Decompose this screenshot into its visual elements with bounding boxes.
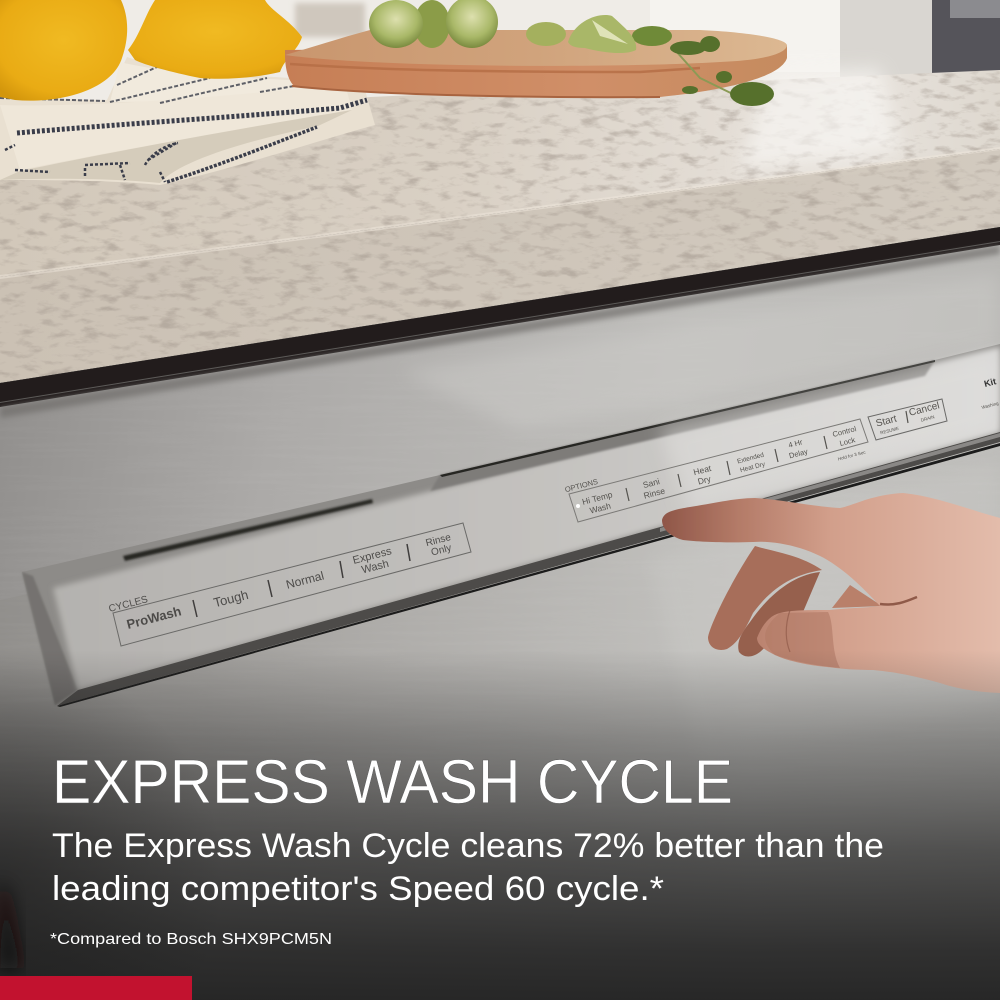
control panel: options group: Start: [875, 414, 898, 430]
control panel: options group: Wash: [589, 501, 612, 516]
dark gradient overlay: [0, 650, 1000, 1000]
control panel: options group: Rinse: [642, 485, 666, 501]
control panel: options group: [564, 376, 1000, 522]
towel: [0, 57, 375, 185]
control panel: options group: DRAIN: [920, 414, 935, 423]
body text: leading competitor's Speed 60 cycle.*: [52, 870, 664, 908]
control panel: options group: Control: [832, 424, 858, 439]
herbs: [670, 36, 774, 106]
control panel: options group: Hi Temp: [581, 489, 614, 507]
control panel: options group: Washing: [981, 401, 1000, 410]
control panel: cycles group: Express: [352, 545, 393, 567]
control panel: cycles group: Only: [430, 543, 453, 558]
control panel: cycles group: Normal: [285, 569, 325, 592]
control panel: options group: Dry: [697, 473, 713, 487]
control panel: options group: 4 Hr: [787, 437, 804, 450]
control panel: cycles group: CYCLES: [108, 594, 149, 615]
control panel: cycles group: Rinse: [425, 532, 453, 549]
control panel recess: [22, 344, 1000, 707]
control panel: cycles group: Wash: [360, 558, 390, 576]
background: kitchen wall: [0, 0, 1000, 130]
body text: [52, 827, 884, 908]
control panel: cycles group: Tough: [212, 587, 250, 610]
dishwasher stainless door: [0, 227, 1000, 1000]
lemons: [0, 0, 302, 101]
control panel: options group: Delay: [788, 447, 809, 460]
control panel: options group: Extended: [736, 452, 765, 465]
control panel: options group: Lock: [839, 435, 856, 448]
brussels sprouts: [369, 0, 672, 53]
body text: The Express Wash Cycle cleans 72% better than the: [52, 827, 884, 865]
control panel: options group: OPTIONS: [564, 477, 599, 494]
control panel: options group: Hold for 3 Sec: [837, 449, 867, 462]
hand pressing button: [662, 493, 1000, 693]
control panel: options group: Kit: [983, 376, 997, 389]
control panel: options group: Cancel: [908, 400, 941, 419]
cutting board: [285, 30, 787, 97]
footnote: *Compared to Bosch SHX9PCM5N: [50, 931, 332, 948]
countertop: [0, 60, 1000, 390]
red accent bar: [0, 976, 192, 1000]
headline: EXPRESS WASH CYCLE: [52, 748, 733, 817]
control panel: cycles group: ProWash: [125, 603, 183, 632]
control panel: options group: Heat Dry: [739, 461, 767, 474]
control panel: options group: Sani: [642, 476, 661, 490]
control panel: cycles group: [108, 523, 471, 646]
control panel: options group: RESUME: [880, 426, 900, 435]
control panel: options group: Heat: [692, 463, 713, 477]
